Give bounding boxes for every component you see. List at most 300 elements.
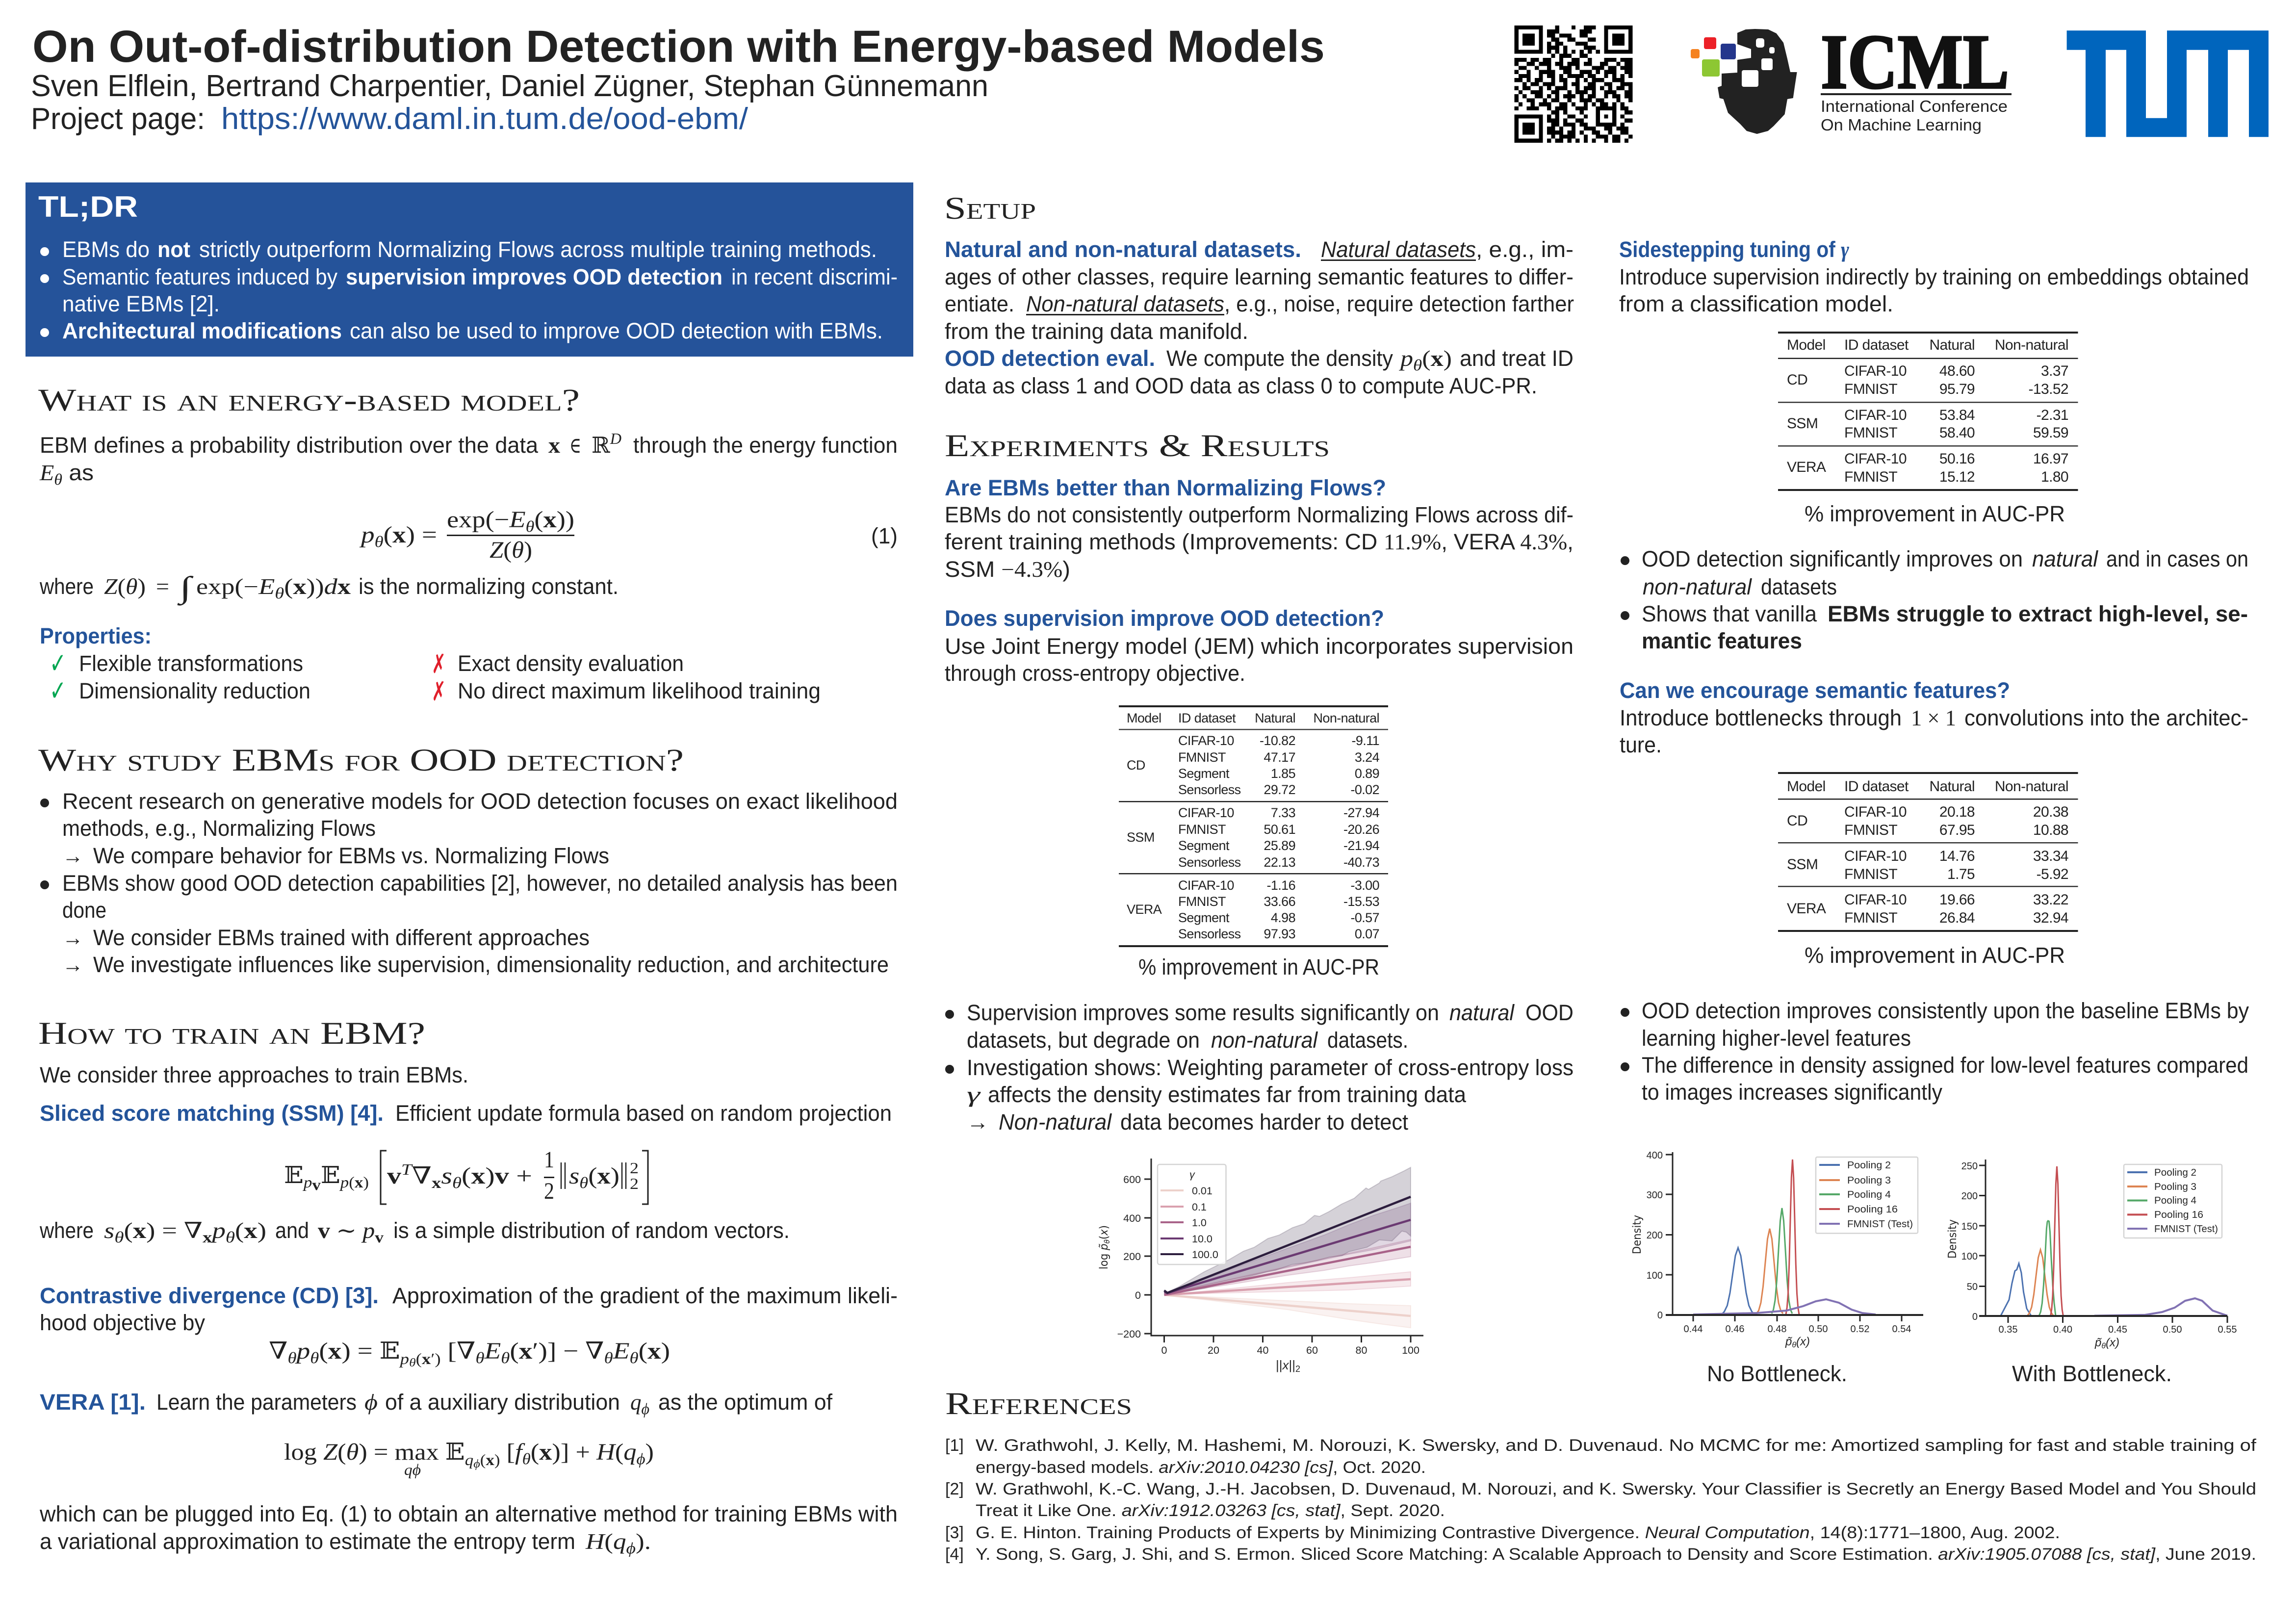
x tick labels: 80 xyxy=(1356,1344,1367,1356)
TL;DR text: Semantic features induced by xyxy=(62,264,337,289)
CD text: Approximation of the gradient of the maximum likeli- xyxy=(392,1283,898,1308)
y tick labels: 0 xyxy=(1972,1312,1978,1322)
chart: no bottleneck density xyxy=(1631,1150,1923,1349)
x axis title: θ xyxy=(1792,1341,1796,1349)
y axis title: ( xyxy=(1098,1236,1110,1239)
table: bottleneck improvement: 26.84 xyxy=(1939,910,1975,926)
x axis title: p̃ xyxy=(2095,1336,2101,1349)
table: bottleneck improvement: Non-natural xyxy=(1995,778,2068,795)
panel: TL;DR xyxy=(26,182,913,357)
text: Introduce supervision indirectly by training on embeddings obtained xyxy=(1619,264,2249,289)
y tick labels: 200 xyxy=(1647,1230,1663,1241)
VERA equation: ϕ xyxy=(636,1450,645,1468)
CD text: Contrastive divergence (CD) [3]. xyxy=(40,1283,379,1308)
table: embeddings improvement: 3.37 xyxy=(2041,363,2068,379)
table: embeddings improvement: ID dataset xyxy=(1844,337,1909,353)
supervision findings: natural xyxy=(1449,1000,1515,1025)
supervision findings: datasets, but degrade on xyxy=(967,1028,1200,1053)
text: from a classification model. xyxy=(1619,291,1893,316)
density curves xyxy=(1693,1160,1876,1315)
text: Introduce bottlenecks through xyxy=(1620,705,1902,730)
CD equation: θ xyxy=(409,1357,416,1369)
SSM equation: 2 xyxy=(630,1175,639,1192)
SSM explanation: ( xyxy=(124,1218,133,1243)
VERA equation: x) xyxy=(486,1451,500,1469)
SSM explanation: x) xyxy=(244,1218,265,1243)
VERA equation: θ xyxy=(522,1450,531,1468)
x tick labels: 100 xyxy=(1402,1344,1419,1356)
equation 1: Z(θ) xyxy=(490,537,532,563)
ICML subtitle line 1: International Conference xyxy=(1821,97,2008,115)
CD equation: x) xyxy=(647,1338,669,1364)
heading: How to train an EBM? xyxy=(38,1016,425,1051)
x axis title: (x) xyxy=(1796,1335,1810,1348)
question: Sidestepping tuning of γ xyxy=(1619,237,1849,262)
table: embeddings improvement: Model xyxy=(1787,337,1826,353)
table: bottleneck improvement: 67.95 xyxy=(1939,822,1975,838)
JEM text: through cross-entropy objective. xyxy=(945,661,1245,686)
datasets text: ages of other classes, require learning semantic features to differ- xyxy=(945,264,1574,289)
definition text: θ xyxy=(54,470,62,488)
SSM equation: (x) xyxy=(349,1173,368,1191)
table: bottleneck improvement: CIFAR-10 xyxy=(1844,892,1907,908)
findings: and in cases on xyxy=(2106,546,2248,571)
reference 4: [4] xyxy=(945,1545,964,1564)
table: supervision improvement: ID dataset xyxy=(1178,711,1236,725)
SSM equation: x)v + xyxy=(471,1163,528,1189)
SSM explanation: v ∼ p xyxy=(318,1218,374,1243)
x tick labels: 0.44 xyxy=(1684,1324,1703,1335)
project page url: https://www.daml.in.tum.de/ood-ebm/ xyxy=(221,102,748,136)
normalizing constant text: ∫ xyxy=(177,571,194,606)
CD equation: p xyxy=(295,1338,310,1364)
text xyxy=(1620,705,2248,757)
supervision findings: data becomes harder to detect xyxy=(1120,1109,1408,1134)
CD equation: x′) xyxy=(422,1350,439,1367)
answer text: SSM −4.3%) xyxy=(945,557,1070,582)
table: embeddings improvement: 59.59 xyxy=(2033,425,2068,441)
SSM explanation: x xyxy=(203,1228,212,1246)
bullet text: → xyxy=(62,953,83,977)
x tick labels: 0.55 xyxy=(2218,1324,2237,1335)
x tick labels xyxy=(1161,1344,1419,1356)
table: embeddings improvement: FMNIST xyxy=(1844,469,1897,485)
question: EBMs vs normalizing flows: Are EBMs better than Normalizing Flows? xyxy=(945,475,1386,500)
SSM equation: x) xyxy=(597,1163,619,1189)
VERA text: ϕ xyxy=(364,1390,378,1415)
VERA equation: [ xyxy=(500,1439,515,1465)
property: exact density evaluation xyxy=(432,648,684,679)
reference 1: energy-based models. arXiv:2010.04230 [cs] , Oct. 2020. xyxy=(976,1458,1426,1477)
text xyxy=(1619,264,2249,316)
reference 2 xyxy=(945,1480,2256,1520)
equation 1: ( xyxy=(534,507,543,533)
bullet text: We consider EBMs trained with different approaches xyxy=(93,925,590,950)
y tick labels: 100 xyxy=(1961,1251,1978,1262)
VERA text: of a auxiliary distribution xyxy=(385,1390,620,1415)
equation 1: θ xyxy=(526,517,534,535)
datasets text: Natural datasets xyxy=(1321,237,1476,262)
table: bottleneck improvement: SSM xyxy=(1787,856,1818,873)
x tick labels: 0 xyxy=(1161,1344,1167,1356)
datasets text: Non-natural datasets xyxy=(1026,291,1224,316)
datasets text: Natural and non-natural datasets. xyxy=(945,237,1301,262)
project page label: Project page: xyxy=(31,102,205,136)
x axis title: 2 xyxy=(1295,1364,1300,1374)
legend: 0.01 xyxy=(1192,1185,1212,1197)
table: supervision improvement: CD xyxy=(1127,758,1145,773)
VERA text: ϕ xyxy=(641,1400,649,1418)
reference 1 xyxy=(945,1436,2257,1477)
authors: Sven Elflein, Bertrand Charpentier, Daniel Zügner, Stephan Günnemann xyxy=(31,69,988,103)
table: supervision improvement: 4.98 xyxy=(1271,910,1295,925)
table: supervision improvement: 7.33 xyxy=(1271,805,1295,820)
normalizing constant text: is the normalizing constant. xyxy=(359,574,619,599)
SSM equation: 𝔼 xyxy=(284,1162,302,1188)
table: supervision improvement: 0.89 xyxy=(1355,766,1379,781)
VERA equation: q xyxy=(465,1451,473,1469)
intro: We consider three approaches to train EBMs. xyxy=(40,1062,468,1087)
CD text: hood objective by xyxy=(40,1310,205,1335)
table: supervision improvement: -15.53 xyxy=(1343,894,1379,909)
x tick labels: 0.35 xyxy=(1999,1324,2017,1335)
OOD eval text: ( xyxy=(1422,346,1431,371)
y tick labels: 200 xyxy=(1123,1251,1141,1263)
VERA equation: ) xyxy=(645,1439,654,1465)
findings: Shows that vanilla xyxy=(1642,601,1817,626)
table: embeddings improvement: 50.16 xyxy=(1939,451,1975,467)
table: embeddings improvement: CD xyxy=(1787,372,1807,388)
property: flexible transformations: Flexible transformations xyxy=(79,651,303,676)
chart: log density vs norm xyxy=(1098,1159,1423,1374)
y tick labels xyxy=(1961,1161,1978,1322)
JEM text: Use Joint Energy model (JEM) which incorporates supervision xyxy=(945,634,1574,659)
equation 1: x)) xyxy=(543,507,572,533)
x tick labels: 0.46 xyxy=(1726,1324,1744,1335)
VERA equation: log Z(θ) = max 𝔼 xyxy=(284,1439,456,1465)
table: supervision improvement: -3.00 xyxy=(1350,878,1379,893)
table: bottleneck improvement: 33.34 xyxy=(2033,848,2068,864)
table: supervision improvement: 3.24 xyxy=(1355,750,1380,765)
normalizing constant text: Z(θ) xyxy=(104,574,146,599)
reference 2: W. Grathwohl, K.-C. Wang, J.-H. Jacobsen, D. Duvenaud, M. Norouzi, and K. Swersky. Your Classifier is Secretly an Energy Based Model and You Should xyxy=(976,1480,2256,1498)
x axis title: ||x|| xyxy=(1276,1358,1295,1372)
equation 1: x) = xyxy=(392,522,433,548)
y axis title: Density xyxy=(1631,1215,1644,1254)
SSM text: Sliced score matching (SSM) [4]. xyxy=(40,1101,384,1126)
y tick labels: −200 xyxy=(1117,1328,1141,1340)
property: exact density evaluation: Exact density evaluation xyxy=(458,651,684,676)
x tick labels xyxy=(1999,1324,2237,1335)
CD equation: x) = 𝔼 xyxy=(328,1338,392,1364)
table: supervision improvement: 33.66 xyxy=(1264,894,1295,909)
OOD eval text: θ xyxy=(1413,356,1422,374)
answer text: EBMs do not consistently outperform Normalizing Flows across dif- xyxy=(945,502,1574,527)
TL;DR text: in recent discrimi- xyxy=(731,264,898,289)
SSM explanation: where xyxy=(39,1218,94,1243)
table caption: % improvement in AUC-PR xyxy=(1138,954,1379,980)
table: bottleneck improvement: Model xyxy=(1787,778,1826,795)
VERA equation: ( xyxy=(480,1451,486,1469)
definition text: ℝ xyxy=(592,433,610,458)
heading: Experiments & Results xyxy=(945,428,1330,464)
table: supervision improvement: Non-natural xyxy=(1314,711,1379,725)
SSM explanation xyxy=(39,1218,790,1246)
findings: OOD detection improves consistently upon the baseline EBMs by xyxy=(1642,998,2249,1023)
table: supervision improvement: -0.57 xyxy=(1350,910,1379,925)
y tick labels: 250 xyxy=(1961,1161,1978,1172)
table: embeddings improvement xyxy=(1778,332,2078,491)
CD equation: ( xyxy=(639,1338,647,1364)
table: supervision improvement: Segment xyxy=(1178,766,1230,781)
x tick labels: 0.40 xyxy=(2053,1324,2072,1335)
y tick labels: 100 xyxy=(1647,1270,1663,1281)
definition text: as xyxy=(62,460,94,485)
OOD eval text: and treat ID xyxy=(1460,346,1574,371)
TL;DR text: supervision improves OOD detection xyxy=(346,264,722,289)
chart: with bottleneck density xyxy=(1946,1160,2237,1350)
legend xyxy=(2124,1164,2222,1238)
x tick labels: 0.50 xyxy=(1809,1324,1828,1335)
table: supervision improvement: Sensorless xyxy=(1178,782,1241,797)
VERA equation: x)] + H(q xyxy=(539,1439,635,1465)
normalizing constant text: ( xyxy=(284,574,293,599)
table: bottleneck improvement: CD xyxy=(1787,813,1807,829)
property: dimensionality reduction xyxy=(50,674,310,707)
x tick labels: 0.54 xyxy=(1892,1324,1911,1335)
OOD eval text: OOD detection eval. xyxy=(945,346,1155,371)
table: supervision improvement: 25.89 xyxy=(1264,838,1295,853)
legend: Pooling 2 xyxy=(2154,1167,2196,1178)
density curves xyxy=(2001,1166,2227,1316)
SSM equation: x xyxy=(432,1174,441,1191)
table: embeddings improvement: 95.79 xyxy=(1939,381,1975,397)
legend xyxy=(1816,1157,1918,1233)
axes xyxy=(1666,1152,1923,1321)
properties heading: Properties: xyxy=(40,623,152,648)
reference 1: W. Grathwohl, J. Kelly, M. Hashemi, M. Norouzi, K. Swersky, and D. Duvenaud. No MCMC for me: Amortized sampling for fast and stable training of xyxy=(976,1436,2257,1455)
table caption: % improvement in AUC-PR xyxy=(1805,943,2065,968)
CD equation: [∇ xyxy=(441,1338,475,1364)
table: supervision improvement: Sensorless xyxy=(1178,927,1241,941)
y tick labels xyxy=(1117,1174,1141,1340)
table: supervision improvement xyxy=(1119,705,1388,947)
y tick labels xyxy=(1647,1150,1663,1321)
VERA explanation xyxy=(39,1501,898,1557)
CD equation: E xyxy=(484,1338,501,1364)
VERA text: VERA [1]. xyxy=(40,1390,146,1415)
text: 1 × 1 xyxy=(1911,706,1956,730)
text: ture. xyxy=(1620,732,1662,757)
SSM explanation: and xyxy=(275,1218,309,1243)
logo: TUM xyxy=(2067,30,2269,137)
reference 2: [2] xyxy=(945,1480,964,1498)
legend xyxy=(1158,1164,1226,1264)
bullet text: methods, e.g., Normalizing Flows xyxy=(62,816,376,841)
OOD eval text: We compute the density xyxy=(1166,346,1393,371)
table: bottleneck improvement: Natural xyxy=(1929,778,1975,795)
table: bottleneck improvement: 20.18 xyxy=(1939,804,1975,820)
icon: ICML head silhouette xyxy=(1718,29,1797,134)
table: supervision improvement: FMNIST xyxy=(1178,750,1226,765)
x axis title: (x) xyxy=(2106,1336,2119,1349)
SSM text xyxy=(40,1101,892,1126)
CD equation: ∇ xyxy=(269,1338,285,1364)
section: what is an energy-based model xyxy=(38,383,898,707)
equation 1: p xyxy=(360,522,375,548)
table: supervision improvement: FMNIST xyxy=(1178,822,1226,837)
table: bottleneck improvement: -5.92 xyxy=(2037,866,2068,882)
table: supervision improvement: 1.85 xyxy=(1271,766,1295,781)
definition text: x xyxy=(548,433,561,458)
reference 2: Treat it Like One. arXiv:1912.03263 [cs, stat] , Sept. 2020. xyxy=(976,1501,1445,1520)
normalizing constant text: x))dx xyxy=(293,574,348,599)
x tick labels: 0.48 xyxy=(1768,1324,1786,1335)
axes xyxy=(1979,1160,2227,1323)
table: supervision improvement: -40.73 xyxy=(1343,855,1379,870)
bullet text: EBMs show good OOD detection capabilities [2], however, no detailed analysis has been xyxy=(62,871,898,896)
SSM equation: ∇ xyxy=(412,1163,432,1189)
VERA text xyxy=(40,1390,832,1418)
heading: References xyxy=(945,1386,1132,1421)
bullet text: → xyxy=(62,844,83,868)
SSM explanation: p xyxy=(210,1218,226,1243)
table: embeddings improvement: 15.12 xyxy=(1939,469,1975,485)
table: supervision improvement: -0.02 xyxy=(1350,782,1379,797)
table: embeddings improvement: 48.60 xyxy=(1939,363,1975,379)
JEM text xyxy=(945,634,1574,686)
CD equation: θ xyxy=(475,1349,485,1366)
y axis title: θ xyxy=(1103,1239,1111,1244)
table: embeddings improvement: Natural xyxy=(1929,337,1975,353)
VERA equation: f xyxy=(515,1439,525,1465)
SSM equation: ( xyxy=(462,1163,471,1189)
property: flexible transformations: ✓ xyxy=(50,646,66,680)
SSM equation: v xyxy=(312,1176,321,1193)
table: embeddings improvement: 16.97 xyxy=(2033,451,2068,467)
table: bottleneck improvement: CIFAR-10 xyxy=(1844,848,1907,864)
x tick labels: 60 xyxy=(1306,1344,1318,1356)
table: embeddings improvement: 58.40 xyxy=(1939,425,1975,441)
legend: Pooling 4 xyxy=(1847,1189,1891,1200)
table: embeddings improvement: FMNIST xyxy=(1844,425,1897,441)
table: supervision improvement: 22.13 xyxy=(1264,855,1295,870)
supervision findings: Investigation shows: Weighting parameter of cross-entropy loss xyxy=(967,1055,1574,1080)
table: supervision improvement: -10.82 xyxy=(1260,733,1295,748)
legend: 1.0 xyxy=(1192,1217,1207,1229)
supervision findings: affects the density estimates far from training data xyxy=(988,1082,1467,1107)
table: bottleneck improvement: FMNIST xyxy=(1844,822,1897,838)
property: dimensionality reduction: Dimensionality reduction xyxy=(79,678,310,703)
VERA explanation: ϕ xyxy=(626,1539,636,1557)
datasets text: , e.g., noise, require detection farther xyxy=(1224,291,1574,316)
legend: Pooling 16 xyxy=(2154,1210,2203,1220)
table: bottleneck improvement: ID dataset xyxy=(1844,778,1909,795)
table: bottleneck improvement: FMNIST xyxy=(1844,866,1897,882)
y axis title: x) xyxy=(1098,1225,1110,1236)
TL;DR text: Architectural modifications xyxy=(62,318,342,343)
bullet text: We compare behavior for EBMs vs. Normalizing Flows xyxy=(93,843,609,868)
table: supervision improvement: 0.07 xyxy=(1355,927,1379,941)
SSM explanation: is a simple distribution of random vectors. xyxy=(393,1218,790,1243)
bullets xyxy=(40,799,49,889)
bullet text: We investigate influences like supervision, dimensionality reduction, and architecture xyxy=(93,952,889,977)
table: bottleneck improvement: 19.66 xyxy=(1939,892,1975,908)
table: supervision improvement: 50.61 xyxy=(1264,822,1295,837)
TL;DR text: not xyxy=(157,237,190,262)
y tick labels: 400 xyxy=(1647,1150,1663,1161)
table: bottleneck improvement: 14.76 xyxy=(1939,848,1975,864)
SSM equation xyxy=(284,1147,648,1204)
definition text: E xyxy=(39,461,54,485)
normalizing constant text: exp(− E xyxy=(196,574,272,599)
table: supervision improvement: -9.11 xyxy=(1351,733,1379,748)
SSM equation: s xyxy=(441,1163,452,1189)
SSM explanation: θ xyxy=(114,1228,124,1246)
SSM equation: p xyxy=(303,1173,312,1191)
property: flexible transformations xyxy=(50,646,303,680)
property: dimensionality reduction: ✓ xyxy=(50,674,66,707)
CD equation: E xyxy=(613,1338,629,1364)
property: no direct maximum likelihood training: ✗ xyxy=(432,676,446,707)
bullet text: done xyxy=(62,898,106,923)
y tick labels: 300 xyxy=(1647,1190,1663,1201)
CD equation: θ xyxy=(288,1349,297,1366)
equation 1 xyxy=(360,507,574,563)
supervision findings: datasets. xyxy=(1327,1028,1408,1053)
equation 1: exp(− E xyxy=(447,507,524,533)
table: bottleneck improvement xyxy=(1778,772,2078,932)
TL;DR text: can also be used to improve OOD detection with EBMs. xyxy=(350,318,883,343)
TL;DR heading: TL;DR xyxy=(38,190,138,223)
y tick labels: 0 xyxy=(1135,1289,1141,1301)
table: supervision improvement: CIFAR-10 xyxy=(1178,878,1234,893)
SSM equation: v xyxy=(387,1163,401,1189)
table: supervision improvement: -21.94 xyxy=(1343,838,1380,853)
bullets xyxy=(40,247,49,337)
table: embeddings improvement: 53.84 xyxy=(1939,407,1975,423)
section: references xyxy=(945,1386,2257,1564)
SSM explanation: s xyxy=(104,1218,114,1243)
table: bottleneck improvement: 10.88 xyxy=(2033,822,2068,838)
legend: 100.0 xyxy=(1192,1249,1218,1261)
legend: 0.1 xyxy=(1192,1201,1207,1213)
ICML wordmark: ICML xyxy=(1821,19,2009,105)
table: supervision improvement: FMNIST xyxy=(1178,894,1226,909)
supervision findings: non-natural xyxy=(1211,1028,1318,1053)
definition text: ∈ xyxy=(569,433,581,458)
CD equation: θ xyxy=(629,1349,639,1366)
table: supervision improvement: -1.16 xyxy=(1266,878,1295,893)
SSM equation: 2 xyxy=(630,1159,639,1177)
ICML subtitle line 2: On Machine Learning xyxy=(1821,116,1982,134)
SSM explanation: θ xyxy=(226,1228,235,1246)
x tick labels: 0.50 xyxy=(2163,1324,2182,1335)
VERA explanation: ). xyxy=(636,1529,651,1554)
table: bottleneck improvement: 33.22 xyxy=(2033,892,2068,908)
y axis title: log p̃ xyxy=(1098,1243,1110,1269)
uncertainty bands xyxy=(1164,1167,1411,1328)
VERA equation: ( xyxy=(531,1439,539,1465)
supervision findings: Non-natural xyxy=(999,1109,1112,1134)
y tick labels: 0 xyxy=(1657,1310,1663,1321)
y tick labels: 400 xyxy=(1123,1212,1141,1224)
VERA equation xyxy=(284,1439,654,1478)
icon: QR code xyxy=(1515,27,1632,141)
datasets text xyxy=(945,237,1574,344)
SSM equation: 1 xyxy=(544,1147,554,1173)
heading: What is an energy-based model? xyxy=(38,383,580,418)
